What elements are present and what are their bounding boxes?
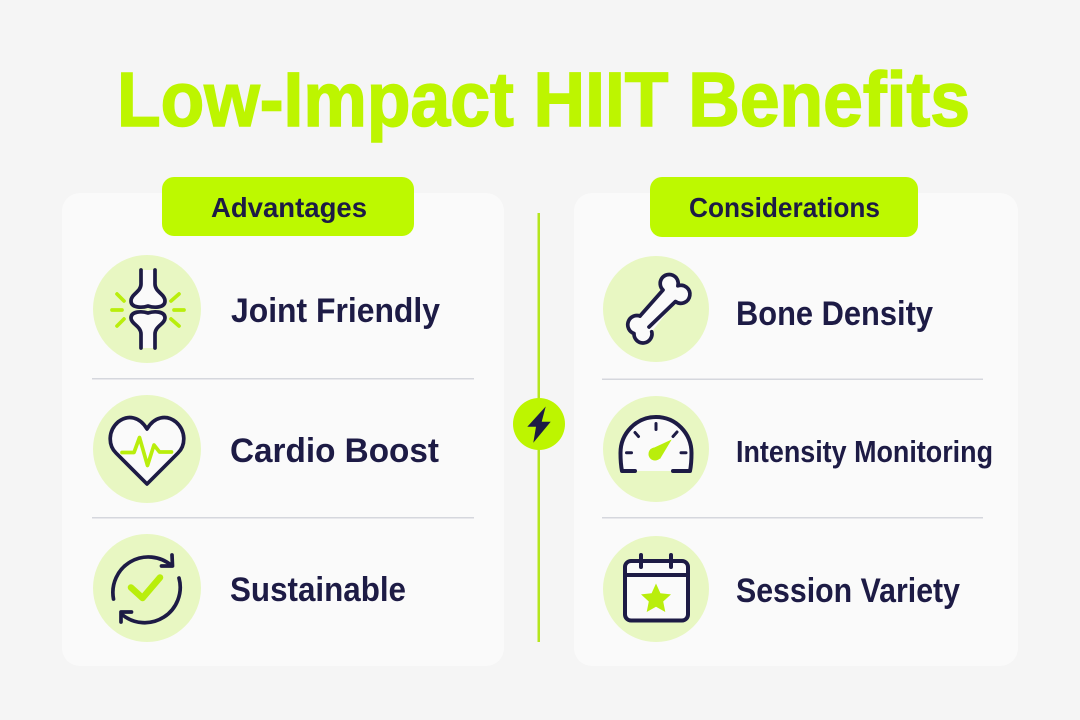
label: joint friendly: Joint Friendly: [231, 292, 440, 330]
panel: advantages: [62, 177, 504, 666]
panel background: considerations: [574, 193, 1018, 666]
icon: lightning bolt: [527, 406, 551, 443]
title: Low-Impact HIIT Benefits: [117, 57, 970, 143]
row: bone density: [603, 256, 933, 362]
icon: gauge needle: [648, 440, 672, 460]
label: session variety: Session Variety: [736, 572, 960, 610]
row: intensity monitoring: [603, 396, 993, 502]
panel: considerations: [574, 177, 1018, 666]
icon: heart with pulse: [110, 418, 184, 484]
label: intensity monitoring: Intensity Monitoring: [736, 434, 993, 469]
label: bone density: Bone Density: [736, 295, 933, 333]
row: session variety: [603, 536, 960, 642]
badge: advantages: Advantages: [211, 192, 367, 223]
center divider with bolt: [513, 213, 565, 642]
icon: gauge: [620, 417, 692, 471]
icon: knee joint: [112, 270, 184, 348]
label: cardio boost: Cardio Boost: [230, 432, 439, 470]
row: sustainable: [93, 534, 406, 642]
panel background: advantages: [62, 193, 504, 666]
label: sustainable: Sustainable: [230, 571, 406, 609]
row: cardio boost: [93, 395, 439, 503]
badge: considerations: [650, 177, 918, 237]
badge: considerations: Considerations: [689, 192, 880, 223]
row: joint friendly: [93, 255, 440, 363]
icon: bone: [628, 274, 690, 343]
badge: advantages: [162, 177, 414, 236]
icon: refresh with check: [113, 555, 180, 623]
icon: calendar with star: [625, 555, 688, 620]
